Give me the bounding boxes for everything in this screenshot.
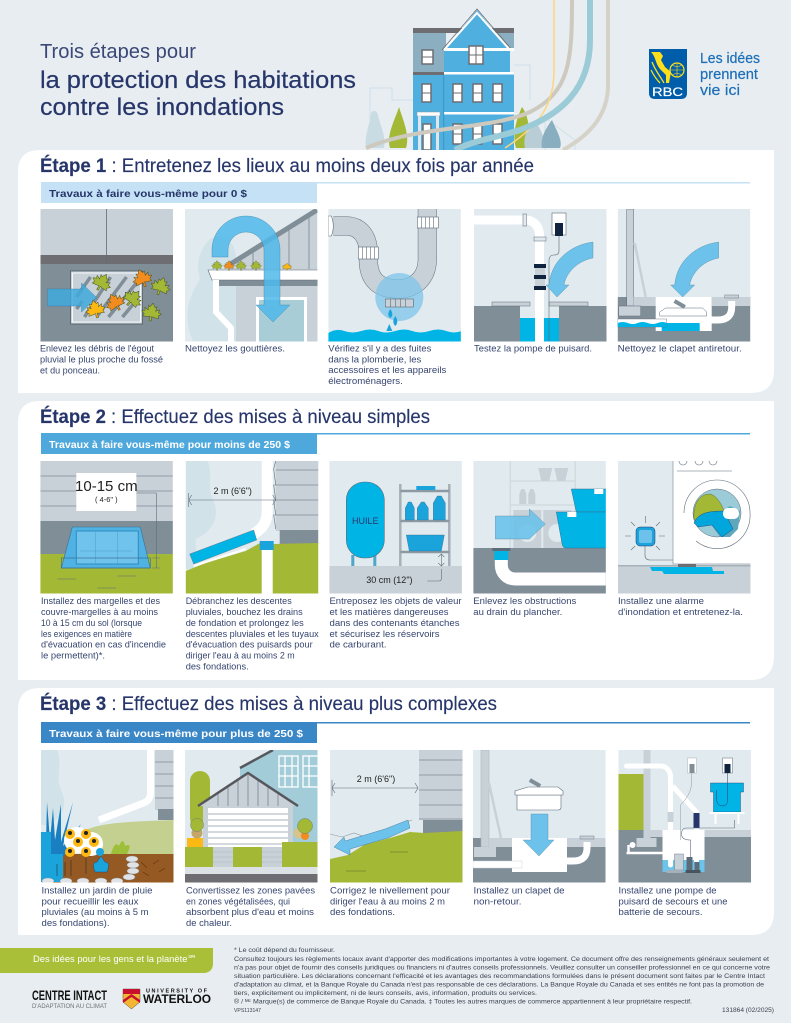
- caption: [42, 886, 152, 929]
- band: budget moins de 250 $: [41, 433, 317, 454]
- caption: de fondation et prolongez les: [186, 618, 304, 629]
- left green tree: [389, 107, 407, 148]
- caption: diriger l'eau à au moins 2 m: [186, 650, 295, 662]
- tagline: [700, 50, 760, 99]
- card: égout pluvial: [40, 209, 174, 376]
- caption: Nettoyez le clapet antiretour.: [618, 344, 742, 354]
- legal footnote: [234, 947, 774, 1014]
- swoosh: blue: [455, 0, 590, 150]
- caption: et sécurisez les réservoirs: [330, 629, 440, 640]
- legal footnote: Consultez toujours les règlements locaux avant d'apporter des modifications importantes à votre logement. Ce document offre des renseignements généraux seulement et: [234, 956, 769, 963]
- swoosh: yellow: [505, 0, 554, 148]
- caption: 10 à 15 cm du sol (lorsque: [41, 618, 142, 629]
- title line 2: la protection des habitations: [40, 67, 356, 94]
- band: budget plus de 250 $: [41, 722, 317, 743]
- card: objets de valeur: [329, 461, 462, 650]
- caption: de carburant.: [330, 640, 386, 650]
- caption: et les matières dangereuses: [330, 607, 449, 618]
- swoosh: beige right: [563, 0, 608, 150]
- tagline: Les idées: [700, 50, 760, 67]
- caption: des fondations.: [330, 907, 395, 918]
- logo: Centre Intact: D'ADAPTATION AU CLIMAT: [32, 1004, 107, 1010]
- illustration: backwater valve cleaning: [618, 209, 751, 342]
- caption: des fondations.: [186, 662, 249, 672]
- illustration: regrading: [330, 750, 463, 883]
- RBC logo: [649, 49, 760, 99]
- illustration: oil tank and shelves: 30 cm (12"): [366, 575, 413, 585]
- card: pompe de puisard: [474, 209, 607, 354]
- legal footnote: ® / ᴹᶜ Marque(s) de commerce de Banque Royale du Canada. ‡ Toutes les autres marques de commerce appartiennent à leur propriétaire respectif.: [234, 998, 692, 1006]
- illustration: oil tank and shelves: HUILE: [352, 516, 379, 526]
- panel background 3: [18, 688, 774, 935]
- illustration: backwater valve install: [473, 750, 606, 883]
- illustration: downspout extension: 2 m (6'6"): [213, 486, 252, 496]
- caption: [618, 886, 728, 918]
- caption: diriger l'eau à au moins 2 m: [330, 896, 445, 908]
- caption: [41, 596, 166, 662]
- caption: Débranchez les descentes: [186, 596, 292, 607]
- title line 3: contre les inondations: [40, 94, 284, 121]
- caption: [186, 596, 319, 672]
- title: [40, 41, 356, 121]
- card: alarme d'inondation: [618, 457, 753, 618]
- caption: non-retour.: [474, 896, 522, 908]
- tagline: vie ici: [700, 82, 740, 99]
- band: budget plus de 250 $: Travaux à faire vous-même pour plus de 250 $: [49, 728, 303, 740]
- caption: pluvial le plus proche du fossé: [40, 354, 163, 366]
- illustration: window well: 10-15 cm: [75, 478, 138, 495]
- pale trees: [366, 111, 384, 148]
- legal footnote: tiers, explicitement ou implicitement, ni de leurs conseils, avis, information, produits ou services.: [234, 990, 537, 997]
- caption: en zones végétalisées, qui: [186, 896, 290, 908]
- house bands: [413, 72, 444, 75]
- caption: batterie de secours.: [618, 907, 702, 918]
- caption: Corrigez le nivellement pour: [330, 886, 451, 896]
- card: clapet antiretour: [618, 209, 751, 354]
- caption: puisard de secours et une: [618, 896, 728, 908]
- house windows: [422, 46, 502, 150]
- illustration: regrading: 2 m (6'6"): [357, 774, 395, 784]
- legal footnote: situation particulière. Les déclarations concernant l'efficacité et les avantages des recommandations formulées dans le présent document sont faites par le Centre Intact: [234, 973, 765, 980]
- right trees: [514, 107, 529, 148]
- caption: Entreposez les objets de valeur: [330, 596, 462, 607]
- caption: pour recueillir les eaux: [42, 896, 139, 908]
- illustration: oil tank and shelves: [329, 461, 462, 594]
- caption: [186, 886, 315, 929]
- card: nivellement: [330, 750, 463, 918]
- band: budget 0 $: Travaux à faire vous-même pour 0 $: [49, 188, 247, 200]
- heading étape 3: Étape 3 : Effectuez des mises à niveau plus complexes: [40, 693, 497, 715]
- caption: pluviales, bouchez les drains: [186, 607, 303, 618]
- legal footnote: VPS113147: [234, 1008, 261, 1014]
- legal footnote: n'a pas pour objet de fournir des conseils juridiques ou financiers ni d'autres conseils professionnels. Veuillez consulter un conseiller professionnel en ce qui concerne votre: [234, 964, 770, 972]
- tagline: prennent: [700, 66, 759, 83]
- caption: Vérifiez s'il y a des fuites: [328, 344, 431, 354]
- front porch: [417, 112, 440, 116]
- illustration: floor drain: [473, 461, 606, 594]
- caption: Testez la pompe de puisard.: [474, 344, 592, 354]
- illustration: leaking pipe: [328, 209, 461, 342]
- caption: Enlevez les obstructions: [473, 596, 577, 607]
- caption: de chaleur.: [186, 918, 232, 929]
- caption: Installez un clapet de: [474, 886, 564, 896]
- green tagline tab: [0, 948, 213, 973]
- caption: descentes pluviales et les tuyaux: [186, 629, 319, 640]
- caption: le permettent)*.: [41, 650, 105, 662]
- green tagline tab: Des idées pour les gens et la planète℠: [33, 954, 197, 965]
- caption: les exigences en matière: [41, 629, 132, 640]
- card: clapet de non-retour: [473, 750, 606, 908]
- caption: [40, 344, 163, 376]
- blue house body: [413, 72, 514, 150]
- illustration: flood alarm and washer: [618, 457, 753, 594]
- caption: dans la plomberie, les: [328, 354, 421, 366]
- logo: Centre Intact: CENTRE INTACT: [32, 987, 107, 1003]
- caption: accessoires et les appareils: [328, 365, 446, 376]
- caption: des fondations).: [42, 918, 110, 929]
- panel background 1: [18, 150, 774, 393]
- caption: [618, 596, 743, 618]
- lion emblem: [651, 52, 671, 83]
- card: drain du plancher: [473, 461, 606, 618]
- logo: University of Waterloo: WATERLOO: [143, 992, 211, 1006]
- caption: électroménagers.: [328, 376, 403, 387]
- panel background 2: [18, 401, 774, 680]
- logo: Centre Intact: [32, 987, 107, 1010]
- panel: étape 3: [18, 688, 774, 935]
- logo: University of Waterloo: UNIVERSITY OF: [146, 988, 208, 994]
- Waterloo shield: [123, 989, 140, 1009]
- card: pompe de secours: [618, 750, 752, 918]
- caption: Installez une alarme: [618, 596, 704, 607]
- legal footnote: 131864 (02/2025): [722, 1007, 774, 1014]
- panel: étape 1: [18, 150, 774, 393]
- caption: dans des contenants étanches: [330, 618, 460, 629]
- header illustration: house and water swooshes: [365, 0, 610, 150]
- illustration: gutter with arrow: [185, 209, 318, 342]
- caption: d'évacuation en cas d'incendie: [41, 640, 166, 650]
- caption: absorbent plus d'eau et moins: [186, 907, 314, 918]
- caption: Nettoyez les gouttières.: [185, 344, 285, 354]
- illustration: window well: ( 4-6" ): [95, 495, 118, 504]
- caption: Installez un jardin de pluie: [42, 886, 152, 896]
- illustration: sump pump test: [474, 209, 607, 342]
- gable: [444, 10, 510, 72]
- caption: d'évacuation des puisards pour: [186, 640, 313, 650]
- legal footnote: * Le coût dépend du fournisseur.: [234, 947, 335, 954]
- caption: [473, 596, 577, 618]
- caption: [330, 886, 451, 918]
- card: gouttières: [185, 209, 318, 354]
- logo: University of Waterloo: [123, 988, 211, 1009]
- caption: Installez une pompe de: [618, 886, 716, 896]
- illustration: rain garden: [41, 750, 174, 884]
- caption: d'inondation et entretenez-la.: [618, 607, 743, 618]
- illustration: window well: [40, 461, 173, 594]
- illustration: backup pump and battery: [618, 750, 752, 883]
- illustration: storm drain with leaves: [40, 209, 174, 342]
- caption: Enlevez les débris de l'égout: [40, 344, 154, 354]
- globe: [670, 63, 684, 77]
- heading étape 2: Étape 2 : Effectuez des mises à niveau simples: [40, 406, 430, 428]
- card: zones végétalisées: [185, 750, 323, 929]
- caption: [328, 344, 446, 387]
- band: budget moins de 250 $: Travaux à faire vous-même pour moins de 250 $: [49, 439, 290, 451]
- card: margelles: [40, 461, 173, 662]
- shield: [649, 49, 687, 99]
- card: descentes pluviales: [186, 461, 319, 672]
- heading étape 1: Étape 1 : Entretenez les lieux au moins deux fois par année: [40, 155, 534, 177]
- panel: étape 2: [18, 401, 774, 680]
- title line 1: Trois étapes pour: [40, 41, 196, 63]
- caption: Convertissez les zones pavées: [186, 886, 315, 896]
- background outlines of neighbouring buildings: [370, 64, 576, 150]
- card: plomberie: [328, 209, 461, 387]
- caption: au drain du plancher.: [473, 607, 562, 618]
- swoosh: beige: [366, 0, 572, 148]
- illustration: downspout extension: [186, 461, 319, 594]
- illustration: garage and green zones: [185, 750, 323, 883]
- card: jardin de pluie: [41, 750, 174, 929]
- caption: pluviales (au moins à 5 m: [42, 907, 149, 918]
- upper left house section: [413, 30, 446, 72]
- RBC letters: RBC: [652, 87, 683, 99]
- legal footnote: d'adaptation au climat, et la Banque Royale du Canada n'est pas responsable de ces déclarations. La Banque Royale du Canada et ses entités ne font pas la promotion de: [234, 982, 764, 989]
- caption: couvre-margelles à au moins: [41, 607, 158, 618]
- caption: et du ponceau.: [40, 366, 100, 376]
- caption: [474, 886, 564, 908]
- caption: [330, 596, 462, 650]
- band: budget 0 $: [41, 182, 317, 203]
- caption: Installez des margelles et des: [41, 596, 160, 607]
